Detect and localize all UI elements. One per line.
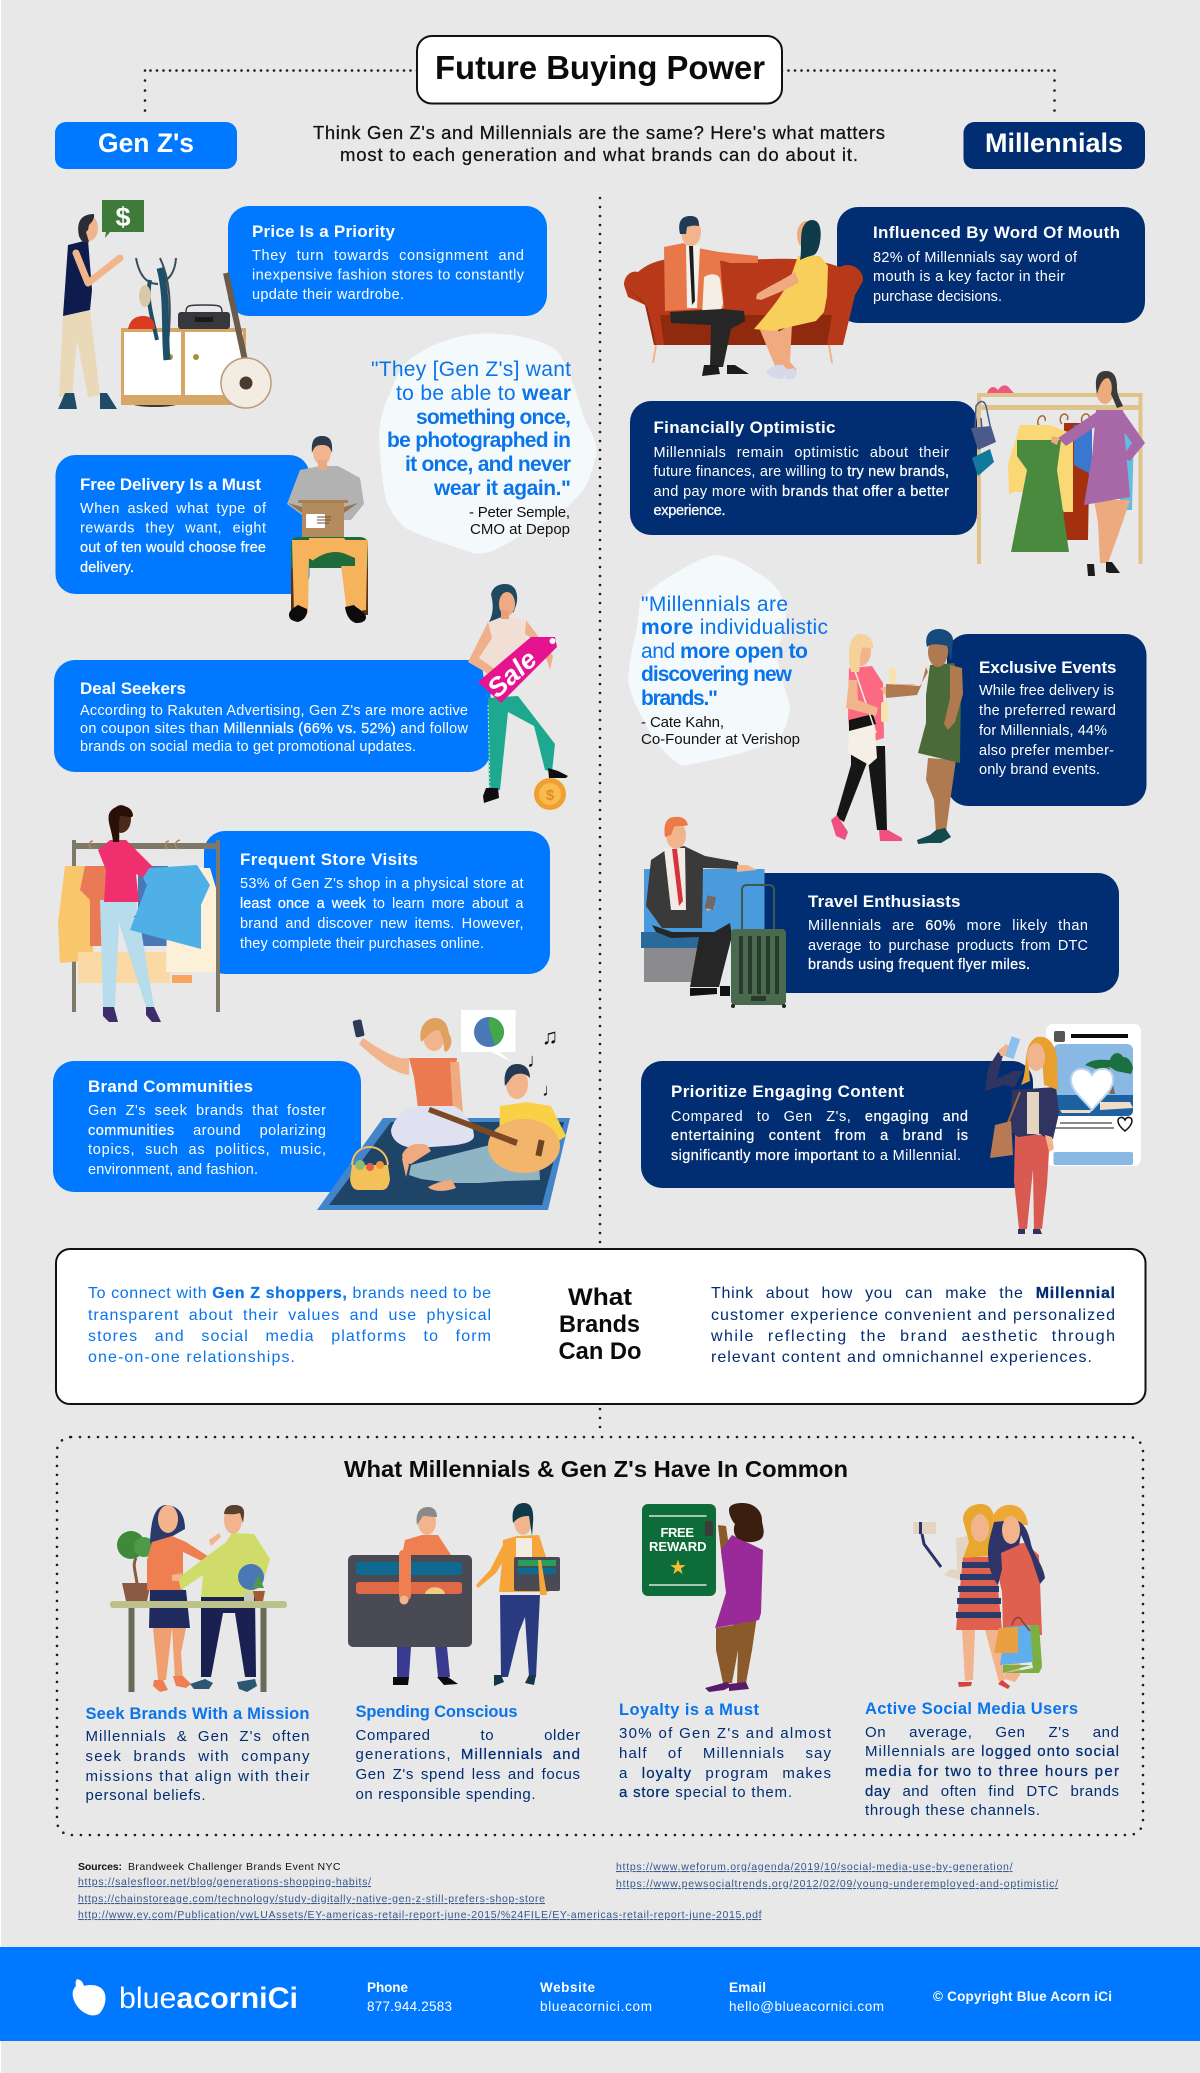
text: Loyalty is a Must: Loyalty is a Must xyxy=(619,1701,760,1719)
text: Millennial advice: customer experience convenient and personalized xyxy=(711,1307,1115,1324)
icon: picnic with guitar: ♩ xyxy=(542,1080,560,1100)
text: Millennial advice: relevant content and omnichannel experiences. xyxy=(711,1349,1092,1366)
panel: Price Is a Priority: inexpensive fashion stores to constantly xyxy=(252,268,525,284)
title: Future Buying Power xyxy=(435,49,765,86)
sources: http://www.ey.com/Publication/vwLUAssets/EY-americas-retail-report-june-2015/%24FILE/EY-americas-retail-report-june-2015.pdf xyxy=(78,1909,762,1921)
sources: https://www.pewsocialtrends.org/2012/02/09/young-underemployed-and-optimistic/ xyxy=(616,1878,1058,1890)
quote: Peter Semple: "They [Gen Z's] want xyxy=(371,358,571,381)
text: Spending Conscious: on responsible spending. xyxy=(356,1786,536,1803)
heading: common: What Millennials & Gen Z's Have In Common xyxy=(344,1456,848,1482)
quote blob: Peter Semple xyxy=(379,334,597,553)
icon: two women toasting xyxy=(831,629,963,844)
heading: Gen Z's: Gen Z's xyxy=(98,128,194,158)
icon: loyalty card and woman: REWARD xyxy=(649,1539,706,1554)
panel: Exclusive Events: also prefer member- xyxy=(979,743,1114,759)
panel: Frequent Store Visits: Frequent Store Visits xyxy=(240,850,418,869)
text: Active Social Media Users: day and often find DTC brands xyxy=(865,1783,1119,1800)
heading: Millennials xyxy=(964,122,1145,169)
panel: What Brands Can Do xyxy=(56,1249,1146,1404)
panel: Influenced By Word Of Mouth: 82% of Millennials say word of xyxy=(873,250,1078,266)
panel: Brand Communities: Gen Z's seek brands that foster xyxy=(88,1103,326,1119)
text: Seek Brands With a Mission: Seek Brands With a Mission xyxy=(86,1705,310,1723)
text: Active Social Media Users: Active Social Media Users xyxy=(865,1700,1078,1718)
panel: Exclusive Events: for Millennials, 44% xyxy=(979,723,1107,739)
connector: title to Gen Z xyxy=(145,69,417,72)
panel: Price Is a Priority: Price Is a Priority xyxy=(252,222,396,241)
panel: Brand Communities: environment, and fashion. xyxy=(88,1162,258,1178)
quote: Cate Kahn: more individualistic xyxy=(641,616,828,639)
text: Loyalty is a Must: half of Millennials say xyxy=(619,1745,832,1762)
panel: Prioritize Engaging Content: Prioritize Engaging Content xyxy=(671,1082,904,1101)
icon: woman with sale tag and coin xyxy=(468,584,568,810)
logo wordmark: blueacorniCi xyxy=(119,1982,298,2015)
panel: Deal Seekers: According to Rakuten Advertising, Gen Z's are more active xyxy=(80,703,468,719)
panel: Frequent Store Visits: brand and discover new items. However, xyxy=(240,916,524,932)
footer xyxy=(0,1947,1200,2041)
quote: Peter Semple: something once, xyxy=(416,406,571,429)
text: Gen Z advice: one-on-one relationships. xyxy=(88,1349,295,1366)
panel: Financially Optimistic: Financially Optimistic xyxy=(654,418,836,437)
panel: Travel Enthusiasts: average to purchase products from DTC xyxy=(808,938,1088,954)
heading: What Brands Can Do: What xyxy=(568,1284,632,1311)
panel: Price Is a Priority: They turn towards consignment and xyxy=(252,248,524,264)
contact: phone: 877.944.2583 xyxy=(367,1999,452,2014)
text: Active Social Media Users: Millennials are logged onto social xyxy=(865,1743,1119,1760)
text: Seek Brands With a Mission xyxy=(86,1705,310,1804)
text: Loyalty is a Must: a loyalty program makes xyxy=(619,1765,831,1782)
text: Gen Z advice xyxy=(88,1285,491,1366)
heading: Millennials: Millennials xyxy=(985,128,1123,158)
panel: Prioritize Engaging Content: Compared to Gen Z's, engaging and xyxy=(671,1109,968,1125)
text: Active Social Media Users xyxy=(865,1700,1119,1819)
panel: Exclusive Events: only brand events. xyxy=(979,762,1100,778)
panel: Free Delivery Is a Must: When asked what type of xyxy=(80,501,267,517)
sources xyxy=(78,1861,1058,1921)
text: Millennial advice: Think about how you can make the Millennial xyxy=(711,1285,1115,1302)
intro text xyxy=(313,122,885,165)
icon: woman at tan clothes rail xyxy=(971,371,1145,576)
quote: Peter Semple xyxy=(371,358,571,538)
panel: Influenced By Word Of Mouth: purchase decisions. xyxy=(873,289,1002,305)
text: Spending Conscious xyxy=(356,1703,580,1803)
text: Millennial advice xyxy=(710,1285,1115,1366)
text: Loyalty is a Must: a store special to them. xyxy=(619,1784,792,1801)
quote: Cate Kahn xyxy=(641,593,828,748)
icon: couple on red sofa xyxy=(624,216,863,379)
panel: What Millennials and Gen Z's Have In Common xyxy=(57,1437,1143,1835)
intro text: most to each generation and what brands can do about it. xyxy=(340,144,858,165)
quote: Cate Kahn: brands." xyxy=(641,687,718,710)
panel: Financially Optimistic: experience. xyxy=(654,503,726,519)
text: Active Social Media Users: through these channels. xyxy=(865,1802,1040,1819)
panel: Price Is a Priority: update their wardrobe. xyxy=(252,287,404,303)
sources: Sources: xyxy=(78,1861,122,1873)
icon: woman at clothes rack xyxy=(58,805,220,1022)
quote: Peter Semple: wear it again." xyxy=(433,477,571,500)
panel: Frequent Store Visits: least once a week to learn more about a xyxy=(240,896,524,912)
quote: Peter Semple: be photographed in xyxy=(387,429,571,452)
contact: phone: Phone xyxy=(367,1980,408,1995)
text: Seek Brands With a Mission: missions that align with their xyxy=(86,1768,310,1785)
quote: Peter Semple: - Peter Semple, xyxy=(469,504,570,521)
sources: https://salesfloor.net/blog/generations-shopping-habits/ xyxy=(78,1876,371,1888)
icon: acorn logo xyxy=(73,1979,106,2015)
quote: Cate Kahn: and more open to xyxy=(641,640,808,663)
panel: Frequent Store Visits xyxy=(204,831,550,974)
panel: Free Delivery Is a Must: delivery. xyxy=(80,560,134,576)
panel: Travel Enthusiasts xyxy=(740,873,1119,993)
text: Seek Brands With a Mission: personal beliefs. xyxy=(86,1787,206,1804)
text: Spending Conscious: Compared to older xyxy=(356,1727,580,1744)
icon: picnic with guitar: ♩ xyxy=(527,1050,547,1072)
heading: What Brands Can Do: Can Do xyxy=(558,1338,642,1365)
icon: picnic with guitar: ♫ xyxy=(542,1024,558,1049)
icon: loyalty card and woman: ★ xyxy=(669,1557,687,1579)
panel: Brand Communities xyxy=(53,1061,361,1192)
panel: Travel Enthusiasts: brands using frequent flyer miles. xyxy=(808,957,1030,973)
quote: Cate Kahn: Co-Founder at Verishop xyxy=(641,731,800,748)
contact: phone xyxy=(367,1980,452,2014)
intro text: Think Gen Z's and Millennials are the same? Here's what matters xyxy=(313,122,885,143)
panel: Deal Seekers: Deal Seekers xyxy=(80,679,186,698)
sources: Brandweek Challenger Brands Event NYC xyxy=(128,1861,341,1873)
icon: people with giant wallet xyxy=(348,1503,560,1686)
panel: Frequent Store Visits: 53% of Gen Z's shop in a physical store at xyxy=(240,876,524,892)
quote blob: Cate Kahn xyxy=(628,555,790,766)
icon: shopper with thrift furniture: $ xyxy=(115,202,131,232)
icon: man holding parcel xyxy=(287,436,368,623)
panel: Deal Seekers: on coupon sites than Millennials (66% vs. 52%) and follow xyxy=(80,721,469,737)
quote: Peter Semple: it once, and never xyxy=(405,453,571,476)
contact: email: Email xyxy=(729,1980,766,1995)
panel: Exclusive Events: Exclusive Events xyxy=(979,658,1116,677)
panel: Brand Communities: communities around polarizing xyxy=(88,1123,326,1139)
panel: Exclusive Events: While free delivery is xyxy=(979,683,1114,699)
panel: Influenced By Word Of Mouth xyxy=(837,207,1145,323)
text: Seek Brands With a Mission: Millennials & Gen Z's often xyxy=(86,1728,310,1745)
panel: Prioritize Engaging Content: significantly more important to a Millennial. xyxy=(671,1148,961,1164)
text: Gen Z advice: To connect with Gen Z shoppers, brands need to be xyxy=(88,1285,491,1302)
panel: Influenced By Word Of Mouth: mouth is a key factor in their xyxy=(873,269,1065,285)
quote: Cate Kahn: discovering new xyxy=(641,663,793,686)
quote: Cate Kahn: - Cate Kahn, xyxy=(641,714,724,731)
panel: Financially Optimistic: Millennials remain optimistic about their xyxy=(654,445,949,461)
panel: Free Delivery Is a Must: rewards they want, eight xyxy=(80,520,266,536)
text: Active Social Media Users: media for two to three hours per xyxy=(865,1763,1119,1780)
quote: Peter Semple: to be able to wear xyxy=(396,382,571,405)
text: Spending Conscious: generations, Millennials and xyxy=(356,1746,580,1763)
heading: Gen Z's xyxy=(55,122,237,169)
panel: Travel Enthusiasts: Millennials are 60% more likely than xyxy=(808,918,1088,934)
panel: Financially Optimistic: future finances, are willing to try new brands, xyxy=(654,464,949,480)
sources: https://chainstoreage.com/technology/study-digitally-native-gen-z-still-prefers-shop-store xyxy=(78,1893,545,1905)
text: Spending Conscious: Gen Z's spend less and focus xyxy=(356,1766,580,1783)
icon: loyalty card and woman: FREE xyxy=(660,1525,694,1540)
panel: Free Delivery Is a Must xyxy=(56,455,310,594)
icon: loyalty card and woman xyxy=(642,1503,764,1692)
icon: woman with sale tag and coin: $ xyxy=(546,787,555,804)
panel: Influenced By Word Of Mouth: Influenced By Word Of Mouth xyxy=(873,223,1120,242)
quote: Cate Kahn: "Millennials are xyxy=(641,593,788,616)
text: Active Social Media Users: On average, Gen Z's and xyxy=(865,1724,1119,1741)
panel: Financially Optimistic: and pay more with brands that offer a better xyxy=(654,484,949,500)
icon: shopper with thrift furniture xyxy=(58,200,271,409)
panel: Free Delivery Is a Must: Free Delivery Is a Must xyxy=(80,475,261,494)
panel: Deal Seekers xyxy=(54,660,490,772)
panel: Travel Enthusiasts: Travel Enthusiasts xyxy=(808,892,960,911)
contact: website: Website xyxy=(540,1980,595,1995)
panel: Price Is a Priority xyxy=(228,206,547,316)
text: Loyalty is a Must: 30% of Gen Z's and almost xyxy=(619,1725,832,1742)
panel: Exclusive Events xyxy=(947,634,1146,806)
panel: Frequent Store Visits: they complete their purchases online. xyxy=(240,936,484,952)
text: Gen Z advice: transparent about their values and use physical xyxy=(88,1307,491,1324)
text: Seek Brands With a Mission: seek brands with company xyxy=(86,1748,310,1765)
copyright: © Copyright Blue Acorn iCi xyxy=(933,1989,1112,2004)
text: Spending Conscious: Spending Conscious xyxy=(356,1703,518,1721)
contact: website xyxy=(540,1980,652,2014)
panel: Prioritize Engaging Content: entertaining content from a brand is xyxy=(671,1128,968,1144)
panel: Free Delivery Is a Must: out of ten would choose free xyxy=(80,540,266,556)
icon: woman with social post xyxy=(985,1024,1141,1234)
panel: Exclusive Events: the preferred reward xyxy=(979,703,1116,719)
contact: website: blueacornici.com xyxy=(540,1999,652,2014)
panel: Prioritize Engaging Content xyxy=(641,1061,1033,1188)
panel: Brand Communities: Brand Communities xyxy=(88,1077,253,1096)
heading: What Brands Can Do xyxy=(558,1284,642,1365)
panel: Financially Optimistic xyxy=(630,401,977,535)
icon: friends taking selfie xyxy=(913,1504,1045,1689)
sources: https://www.weforum.org/agenda/2019/10/social-media-use-by-generation/ xyxy=(616,1861,1013,1873)
heading: What Brands Can Do: Brands xyxy=(559,1311,640,1338)
icon: woman with sale tag and coin: Sale xyxy=(481,644,543,703)
panel: Deal Seekers: brands on social media to get promotional updates. xyxy=(80,739,416,755)
contact: email: hello@blueacornici.com xyxy=(729,1999,884,2014)
text: Loyalty is a Must xyxy=(619,1701,832,1801)
text: Gen Z advice: stores and social media platforms to form xyxy=(88,1328,491,1345)
title xyxy=(417,36,782,104)
icon: traveller with suitcase xyxy=(641,817,786,1008)
icon: couple at mission table xyxy=(110,1505,287,1692)
panel: Brand Communities: topics, such as politics, music, xyxy=(88,1142,326,1158)
quote: Peter Semple: CMO at Depop xyxy=(470,521,570,538)
text: Millennial advice: while reflecting the brand aesthetic through xyxy=(710,1328,1115,1345)
icon: picnic with guitar xyxy=(317,1010,570,1210)
contact: email xyxy=(729,1980,884,2014)
